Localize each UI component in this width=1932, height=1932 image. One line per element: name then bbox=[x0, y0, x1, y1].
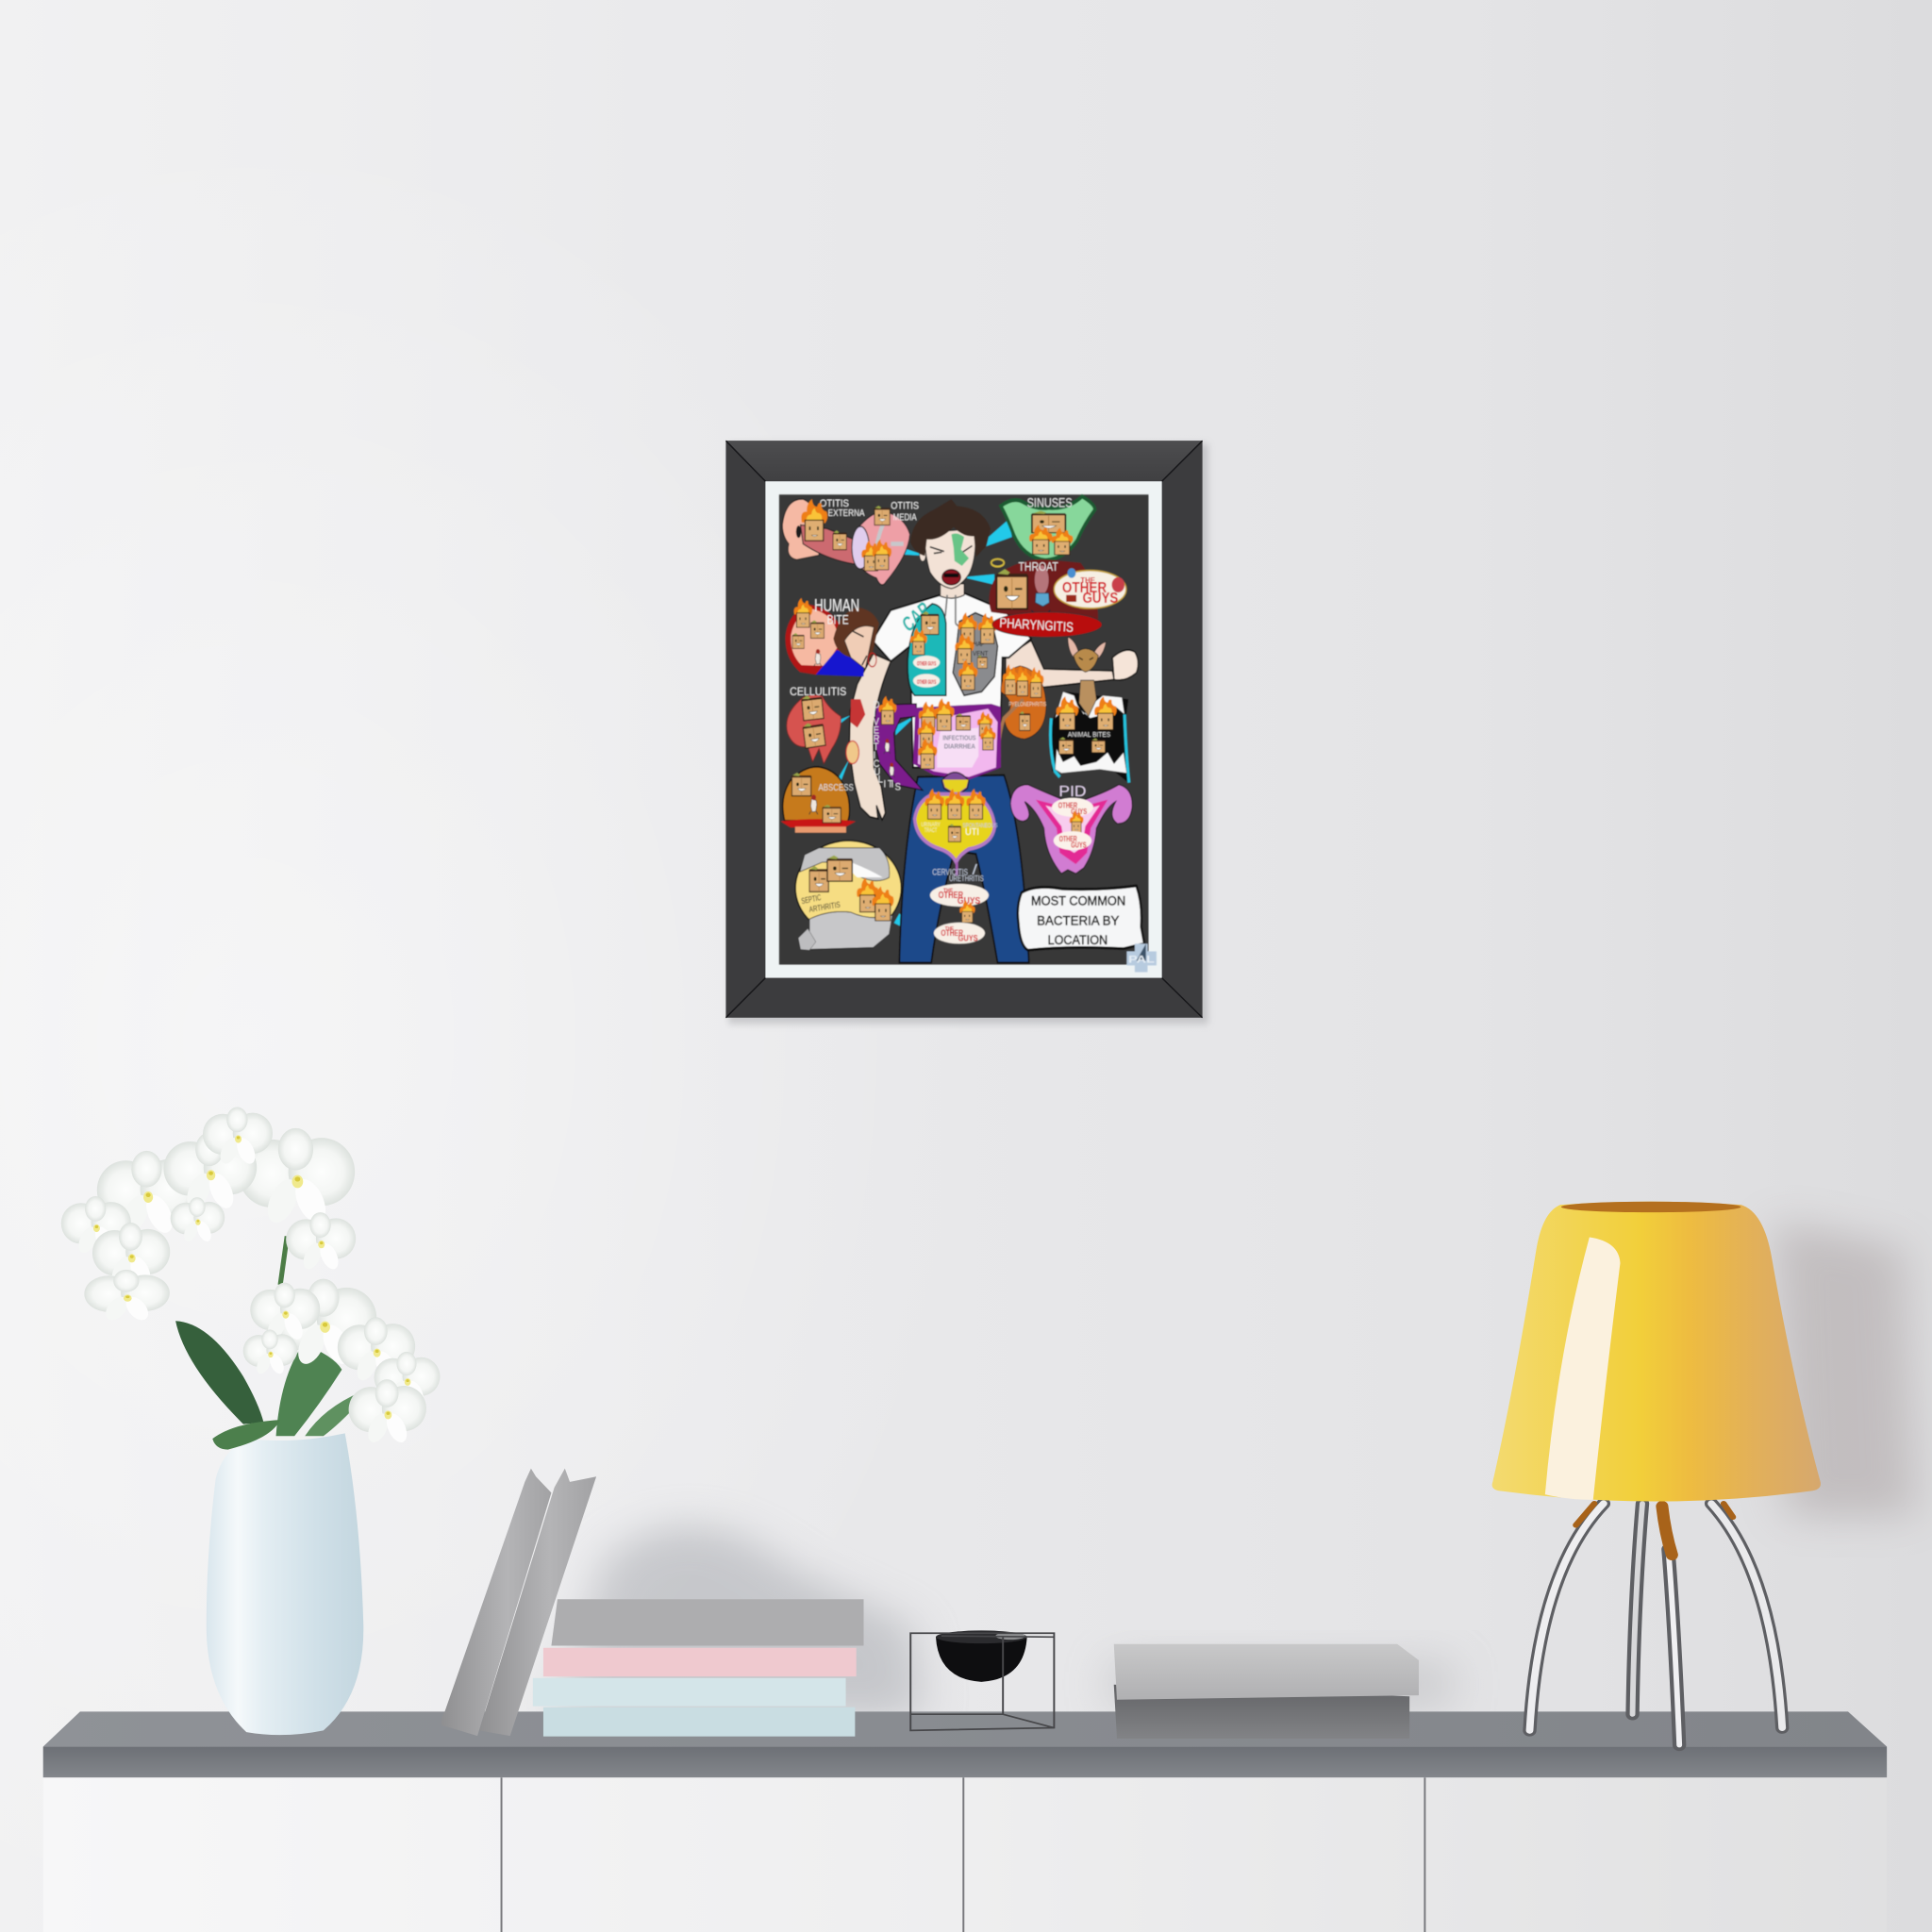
badge: the other guys: GUYS bbox=[1071, 807, 1087, 816]
pink book bbox=[543, 1648, 857, 1676]
label bbox=[820, 498, 865, 518]
badge: the other guys: THE bbox=[943, 888, 953, 894]
title speech bubble: LOCATION bbox=[1048, 933, 1108, 947]
badge: the other guys: THE bbox=[945, 926, 955, 932]
white shirt bbox=[873, 593, 1031, 768]
ear bbox=[782, 499, 819, 559]
label: HAP bbox=[973, 641, 985, 648]
label bbox=[942, 735, 976, 751]
label: DIARRHEA bbox=[944, 743, 975, 751]
label: BITE bbox=[827, 613, 849, 627]
leaning grey books bbox=[441, 1469, 596, 1736]
fist bbox=[1112, 650, 1138, 680]
badge: the other guys: GUYS bbox=[1071, 841, 1087, 850]
blood bbox=[781, 819, 856, 827]
title speech bubble: BACTERIA BY bbox=[1037, 914, 1120, 928]
badge: the other guys: OTHER bbox=[941, 928, 963, 938]
label: PYELONEPHRITIS bbox=[1008, 701, 1046, 708]
label: EXTERNA bbox=[828, 508, 865, 518]
bacteria bbox=[919, 702, 938, 732]
face bbox=[924, 528, 975, 589]
orchid in pale blue vase bbox=[61, 1107, 441, 1735]
labels: URINARY bbox=[921, 823, 941, 828]
bacteria bbox=[794, 598, 812, 627]
upper bone bbox=[800, 848, 890, 881]
badge: the other guys: GUYS bbox=[1082, 590, 1118, 606]
panel: sinuses bbox=[1001, 496, 1095, 560]
shade highlight bbox=[1545, 1238, 1620, 1500]
left arm and hand bbox=[849, 654, 891, 820]
jeans bbox=[899, 775, 1029, 963]
orchid leaves bbox=[95, 1183, 373, 1450]
badge: the other guys: GUYS bbox=[958, 895, 980, 906]
sinus shape bbox=[1001, 496, 1095, 560]
green sinus patch bbox=[952, 534, 969, 566]
badge: the other guys: OTHER bbox=[1058, 801, 1078, 810]
label: pharyngitis: PHARYNGITIS bbox=[999, 615, 1074, 635]
badge: the other guys bbox=[934, 923, 985, 943]
ears bbox=[920, 548, 925, 561]
label: MEDIA bbox=[893, 512, 917, 523]
shade opening bbox=[1561, 1202, 1740, 1212]
chihuahua head bbox=[1068, 637, 1106, 672]
sideboard with grey shelf top and white cabinet doors bbox=[43, 1711, 1887, 1932]
endometrium bbox=[1036, 800, 1108, 864]
lamp legs bbox=[1529, 1504, 1782, 1745]
cracker bacterium bbox=[997, 569, 1027, 608]
biter bbox=[816, 608, 879, 676]
flame bacterium bbox=[959, 900, 975, 923]
mouth bbox=[942, 570, 960, 585]
bacteria bbox=[791, 773, 811, 796]
label bbox=[932, 862, 984, 883]
label: CELLULITIS bbox=[790, 687, 846, 698]
trachea bbox=[937, 595, 964, 631]
lung bbox=[908, 604, 946, 695]
white mat bbox=[765, 481, 1162, 978]
badge: the other guys bbox=[1052, 798, 1093, 817]
vase bbox=[207, 1433, 363, 1735]
throat bbox=[990, 559, 1098, 620]
cyan edges bbox=[1051, 714, 1129, 783]
label bbox=[814, 596, 859, 627]
bacteria bbox=[1003, 664, 1018, 695]
label: HUMAN bbox=[814, 596, 859, 615]
label: throat: THROAT bbox=[1019, 559, 1058, 574]
lumen bbox=[937, 727, 978, 768]
panel: chihuahua and animal bites bbox=[1051, 637, 1129, 783]
panel: kidney bbox=[966, 664, 1046, 774]
labels: SPONTANEOUS bbox=[962, 824, 998, 829]
badge: the other guys: GUYS bbox=[958, 934, 978, 943]
PAL logo watermark bbox=[1126, 943, 1157, 973]
bacteria bbox=[1057, 696, 1078, 730]
hair bbox=[910, 499, 991, 558]
uterus with fallopian tubes bbox=[1010, 785, 1132, 874]
label: SEPTIC bbox=[801, 892, 822, 906]
panel: cellulitis bbox=[787, 687, 865, 764]
wall shadows cast by books and lamp bbox=[555, 1220, 1916, 1717]
light blue book bbox=[533, 1678, 846, 1707]
neck bbox=[941, 584, 964, 598]
label bbox=[801, 892, 841, 914]
bacteria bbox=[1032, 510, 1065, 533]
panel: intestines bbox=[913, 698, 1001, 779]
badge: the other guys: OTHER bbox=[1062, 579, 1107, 595]
lower teeth bbox=[1055, 748, 1126, 774]
vertical label: DIVERTICULITIS bbox=[874, 700, 901, 793]
black picture frame bbox=[725, 441, 1203, 1018]
arm wound bbox=[850, 699, 865, 727]
badge: the other guys bbox=[1054, 831, 1091, 850]
label: INFECTIOUS bbox=[942, 735, 976, 742]
PAL logo watermark: PAL bbox=[1128, 955, 1156, 966]
dog body bbox=[1079, 680, 1096, 716]
grey book bbox=[551, 1599, 864, 1645]
grey lung bbox=[953, 613, 998, 695]
frame shadow bbox=[728, 443, 1208, 1024]
panel: lungs with community acquired pneumonia bbox=[899, 597, 946, 695]
middle ear bbox=[858, 511, 910, 585]
jaws bbox=[1052, 691, 1128, 783]
label bbox=[891, 501, 919, 523]
two stacked books on right bbox=[1114, 1644, 1419, 1739]
ureter bbox=[966, 699, 1024, 774]
halo bbox=[991, 559, 1004, 567]
arm boil bbox=[846, 741, 858, 764]
colon wall bbox=[913, 704, 1001, 779]
bacteria bbox=[958, 612, 977, 642]
label: OTITIS bbox=[891, 501, 919, 512]
labels: UTI bbox=[965, 826, 979, 837]
pharyngitis band bbox=[992, 612, 1102, 637]
bacteria bbox=[801, 499, 827, 541]
label: URETHRITIS bbox=[949, 874, 984, 883]
label: PID bbox=[1058, 784, 1087, 800]
flame bacterium bbox=[1070, 810, 1083, 833]
ear canal bbox=[801, 525, 858, 565]
bacteria bbox=[922, 611, 939, 635]
joint space bbox=[795, 841, 901, 936]
pointer arrows bbox=[837, 519, 1012, 935]
bite mark bbox=[868, 653, 876, 667]
panel: septic arthritis bbox=[795, 841, 901, 950]
badge: the other guys: OTHER bbox=[939, 891, 963, 900]
title speech bubble: MOST COMMON bbox=[1031, 894, 1125, 908]
label: ABSCESS bbox=[819, 782, 854, 793]
eyes bbox=[930, 546, 972, 554]
bladder neck bbox=[941, 773, 969, 796]
urethra bbox=[953, 862, 960, 875]
bladder bbox=[915, 794, 994, 862]
eardrum bbox=[852, 526, 869, 569]
badge: the other guys bbox=[1054, 568, 1126, 608]
kidney bbox=[1001, 666, 1046, 739]
badge: the other guys: OTHER bbox=[1059, 834, 1077, 843]
label bbox=[973, 641, 988, 658]
panel: otitis media bbox=[852, 501, 919, 585]
panel: abscess bbox=[781, 741, 858, 833]
title speech bubble bbox=[1018, 886, 1144, 950]
label: SINUSES bbox=[1027, 496, 1073, 510]
poster art bbox=[779, 494, 1157, 973]
panel: diverticulitis bbox=[874, 696, 923, 793]
figure: patient bbox=[849, 499, 1138, 963]
panel: throat and pharyngitis bbox=[990, 559, 1126, 637]
badge: the other guys: OTHER GUYS bbox=[917, 679, 936, 686]
purple colon segment bbox=[874, 704, 923, 791]
label: VENT bbox=[973, 651, 988, 658]
label: CERVICITIS bbox=[932, 868, 969, 877]
label: ARTHRITIS bbox=[808, 900, 841, 914]
lamp shade bbox=[1492, 1202, 1821, 1502]
label: / bbox=[972, 862, 977, 877]
yellow table lamp bbox=[1492, 1202, 1821, 1745]
labels bbox=[921, 823, 998, 837]
bacteria bbox=[801, 694, 824, 721]
labels: TRACT bbox=[924, 828, 938, 834]
bacteria bbox=[874, 506, 890, 525]
black bowl in wire cube bbox=[910, 1630, 1054, 1730]
framed poster: most common bacteria by location bbox=[725, 441, 1208, 1024]
bacteria bbox=[809, 866, 828, 891]
right arm bbox=[1006, 641, 1114, 687]
ossicles bbox=[876, 519, 904, 548]
orchid blossoms bbox=[61, 1107, 441, 1444]
abscess dome bbox=[783, 767, 849, 822]
badge: the other guys bbox=[930, 884, 989, 907]
lower bone bbox=[809, 911, 892, 949]
panel: heart, hospital acquired pneumonia bbox=[953, 612, 998, 695]
label: OTITIS bbox=[820, 498, 849, 509]
panel: pelvic inflammatory disease bbox=[1010, 784, 1132, 874]
label: CAP: CAP bbox=[899, 597, 934, 637]
skin bbox=[795, 826, 846, 833]
light blue book bbox=[543, 1707, 855, 1737]
stacked and leaning books bbox=[441, 1469, 864, 1737]
panel: otitis externa bbox=[782, 498, 865, 565]
upper teeth bbox=[1055, 691, 1124, 718]
bacteria bbox=[925, 789, 944, 819]
panel: cervicitis urethritis bbox=[930, 862, 989, 943]
inflamed skin bbox=[787, 695, 841, 764]
badge: the other guys: OTHER GUYS bbox=[917, 661, 936, 668]
label: ANIMAL BITES bbox=[1068, 732, 1111, 739]
badge: the other guys: THE bbox=[1080, 575, 1095, 585]
dark background bbox=[779, 494, 1148, 965]
panel: bladder and UTI bbox=[915, 773, 998, 875]
panel: human bite bbox=[786, 596, 879, 676]
wound bbox=[786, 605, 843, 675]
bacteria bbox=[879, 696, 896, 724]
